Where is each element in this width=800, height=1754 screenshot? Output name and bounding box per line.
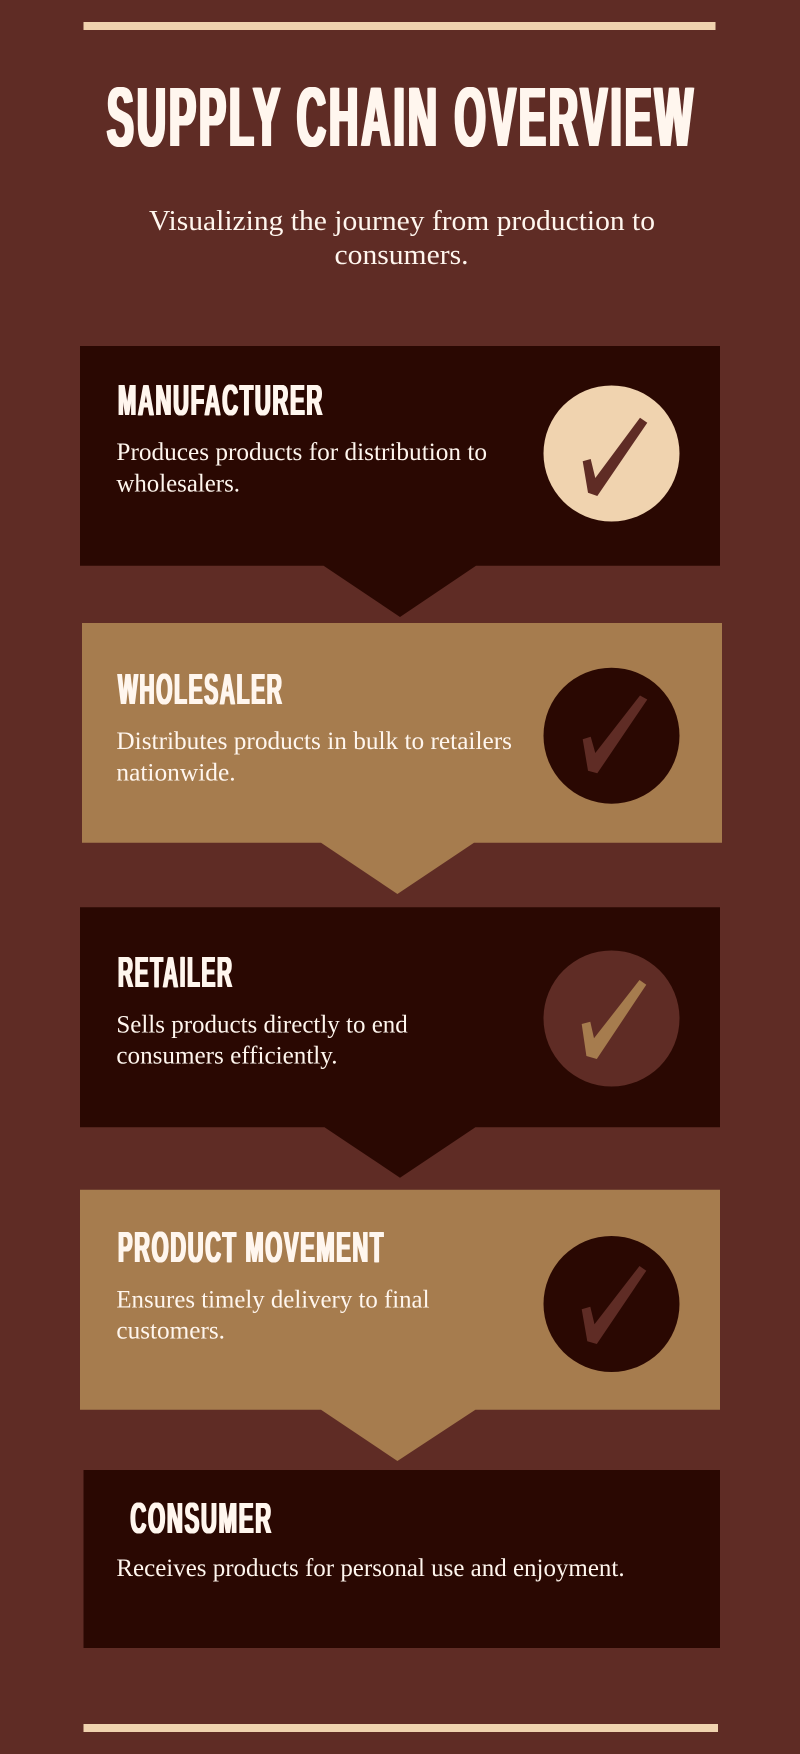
panel: retailer (80, 907, 720, 1178)
subtitle: Visualizing the journey from production to (149, 205, 655, 237)
description: wholesaler: nationwide. (116, 757, 236, 786)
description: retailer: Sells products directly to end (116, 1009, 408, 1038)
panel: product movement: PRODUCT MOVEMENT (118, 1223, 385, 1272)
description: retailer: consumers efficiently. (116, 1040, 338, 1069)
subtitle (149, 205, 655, 271)
panel background with arrow (80, 907, 720, 1178)
panel: consumer (84, 1470, 720, 1648)
description: wholesaler (116, 726, 512, 786)
description: retailer (116, 1009, 408, 1069)
description: consumer: Receives products for personal use and enjoyment. (116, 1553, 625, 1582)
panel background with arrow (80, 346, 720, 617)
description: wholesaler: Distributes products in bulk to retailers (116, 726, 512, 755)
top accent bar (84, 22, 716, 30)
icon: check mark badge (544, 386, 680, 522)
description: product movement: Ensures timely delivery to final (116, 1284, 430, 1313)
description: manufacturer: wholesalers. (116, 468, 240, 497)
subtitle: consumers. (334, 239, 468, 271)
description: product movement (116, 1284, 430, 1344)
panel background with arrow (82, 623, 722, 894)
panel: manufacturer: MANUFACTURER (118, 376, 324, 425)
description: manufacturer (116, 437, 487, 497)
icon: check mark badge (544, 950, 680, 1086)
bottom accent bar (84, 1724, 718, 1732)
icon: check mark badge (544, 668, 680, 804)
panel: wholesaler: WHOLESALER (118, 665, 284, 714)
heading: consumer: CONSUMER (130, 1494, 273, 1543)
icon: check mark badge (544, 1236, 680, 1372)
panel: retailer: RETAILER (118, 948, 234, 997)
description: product movement: customers. (116, 1315, 225, 1344)
panel: wholesaler (82, 623, 722, 894)
panel: manufacturer (80, 346, 720, 617)
panel background with arrow (80, 1190, 720, 1461)
description: manufacturer: Produces products for distribution to (116, 437, 487, 466)
panel: product movement (80, 1190, 720, 1461)
panel background (84, 1470, 720, 1648)
